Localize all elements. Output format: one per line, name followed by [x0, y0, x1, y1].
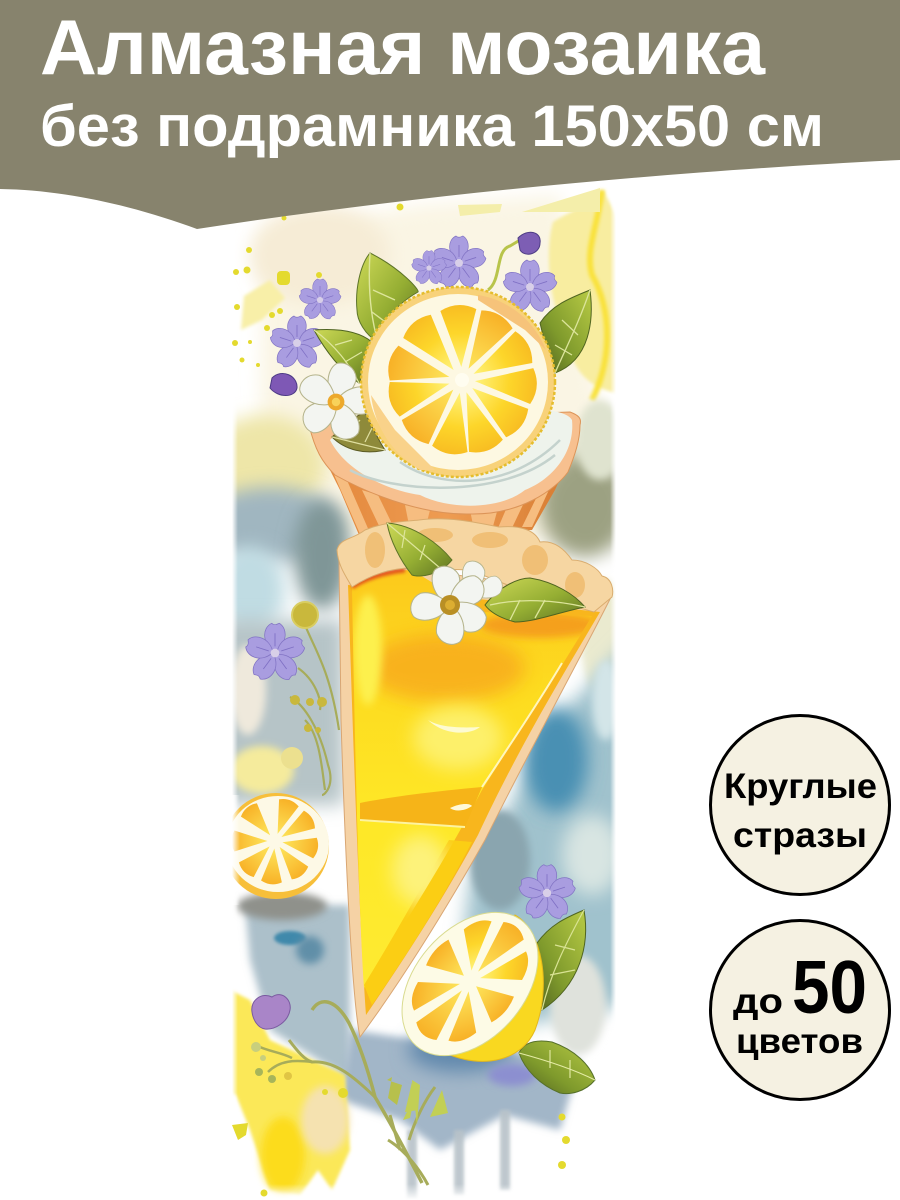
badge: round rhinestones: Круглые: [724, 767, 877, 806]
badge: up to 50 colours: цветов: [736, 1022, 863, 1061]
scalloped crust: [337, 519, 613, 612]
illustration: lemon tart watercolor: [232, 187, 616, 1198]
yellow paint splatters: [232, 204, 570, 1196]
lemon slice on cupcake: [361, 287, 555, 477]
badge: round rhinestones: стразы: [733, 816, 867, 855]
left violet and halved lemon: [223, 623, 577, 1029]
badge: up to 50 colours: [710, 920, 890, 1100]
badge: up to 50 colours: 50: [792, 945, 867, 1029]
subtitle: без подрамника 150х50 см: [40, 94, 824, 159]
title: Алмазная мозаика: [40, 3, 766, 91]
violets and leaves above cupcake: [268, 232, 591, 396]
badge: round rhinestones: [710, 716, 890, 894]
white blossom and dark leaf at cupcake: [296, 361, 385, 452]
cupcake: [309, 407, 581, 535]
stems and small flowers left: [255, 625, 435, 1185]
pie slice: [337, 519, 613, 1037]
badge: up to 50 colours: до: [733, 982, 783, 1021]
watercolor background: [232, 187, 616, 1198]
header banner: [0, 0, 900, 229]
bottom lemon half and leaves: [402, 909, 596, 1094]
